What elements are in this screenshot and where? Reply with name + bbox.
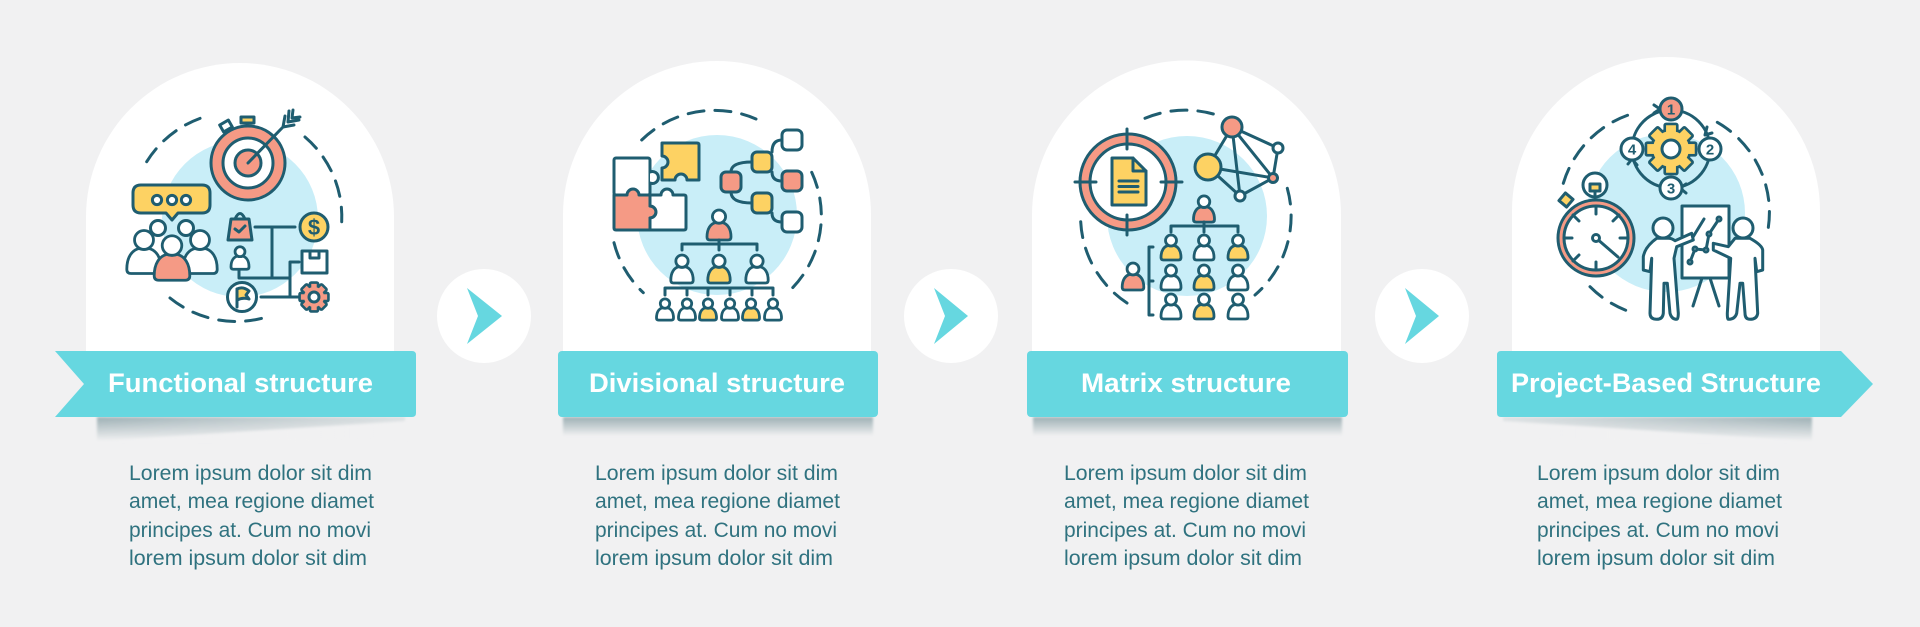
icon: numbered process cycle: 1 bbox=[1667, 102, 1675, 118]
ribbon bbox=[1027, 351, 1348, 417]
icon: target with document bbox=[1075, 129, 1182, 235]
text block bbox=[595, 462, 840, 570]
text block: Lorem ipsum dolor sit dim bbox=[129, 462, 372, 485]
panel: project-based structure bbox=[1497, 57, 1873, 570]
text block: principes at. Cum no movi bbox=[595, 519, 837, 542]
arch background bbox=[86, 63, 394, 355]
pale blue circle bbox=[162, 141, 318, 297]
text block: principes at. Cum no movi bbox=[1537, 519, 1779, 542]
pale blue circle bbox=[637, 135, 797, 295]
ribbon shadow bbox=[563, 417, 873, 436]
icon: org connector lines bbox=[239, 227, 299, 297]
pale blue circle bbox=[1107, 136, 1267, 296]
heading: Project-Based Structure bbox=[1511, 368, 1821, 398]
text block: amet, mea regione diamet bbox=[129, 490, 374, 513]
icon: team of people bbox=[127, 220, 217, 280]
text block: amet, mea regione diamet bbox=[595, 490, 840, 513]
arrow: step 3 to 4 bbox=[1375, 269, 1469, 363]
text block: lorem ipsum dolor sit dim bbox=[595, 547, 833, 570]
icon: shopping bag bbox=[228, 214, 252, 240]
icon: right presenter bbox=[1713, 218, 1763, 319]
heading: Divisional structure bbox=[589, 368, 845, 398]
text block: lorem ipsum dolor sit dim bbox=[1064, 547, 1302, 570]
arrow: step 1 to 2 bbox=[437, 269, 531, 363]
text block: amet, mea regione diamet bbox=[1537, 490, 1782, 513]
icon: numbered process cycle: 2 bbox=[1706, 142, 1714, 158]
ribbon bbox=[1497, 351, 1873, 417]
icon: stopwatch bbox=[1558, 173, 1634, 276]
text block: principes at. Cum no movi bbox=[129, 519, 371, 542]
icon: stopwatch target with arrow bbox=[211, 110, 300, 200]
icon: puzzle bbox=[614, 143, 699, 230]
dashed orbit bbox=[1081, 110, 1291, 306]
icon: box bbox=[302, 251, 327, 273]
text block bbox=[129, 462, 374, 570]
arch background bbox=[563, 61, 871, 355]
ribbon shadow bbox=[1033, 417, 1342, 436]
icon: person bbox=[231, 247, 249, 269]
text block: lorem ipsum dolor sit dim bbox=[129, 547, 367, 570]
dashed orbit bbox=[147, 117, 342, 321]
icon: left presenter bbox=[1643, 218, 1693, 319]
text block: Lorem ipsum dolor sit dim bbox=[1537, 462, 1780, 485]
arch background bbox=[1512, 57, 1820, 355]
ribbon bbox=[558, 351, 878, 417]
dashed orbit bbox=[614, 110, 821, 295]
icon: tree connectors bbox=[731, 140, 782, 222]
panel: matrix structure bbox=[1027, 61, 1348, 570]
text block bbox=[1537, 462, 1782, 570]
icon: tree nodes bbox=[721, 130, 802, 232]
org chart people bbox=[656, 210, 782, 320]
dashed orbit bbox=[1563, 115, 1769, 313]
icon: speech bubble bbox=[133, 185, 210, 220]
text block: principes at. Cum no movi bbox=[1064, 519, 1306, 542]
icon: presentation board bbox=[1682, 206, 1729, 306]
ribbon shadow bbox=[1503, 417, 1812, 441]
text block: Lorem ipsum dolor sit dim bbox=[595, 462, 838, 485]
text block: amet, mea regione diamet bbox=[1064, 490, 1309, 513]
ribbon shadow bbox=[97, 417, 405, 441]
arch background bbox=[1032, 61, 1341, 355]
heading: Functional structure bbox=[108, 368, 373, 398]
arrow: step 2 to 3 bbox=[904, 269, 998, 363]
icon: numbered process cycle bbox=[1621, 98, 1721, 199]
icon: dollar coin: $ bbox=[308, 215, 320, 240]
icon: network nodes bbox=[1195, 117, 1283, 201]
panel: divisional structure bbox=[558, 61, 878, 570]
text block bbox=[1064, 462, 1309, 570]
ribbon bbox=[55, 351, 416, 417]
icon: numbered process cycle: 4 bbox=[1628, 142, 1637, 158]
icon: numbered process cycle: 3 bbox=[1667, 180, 1675, 198]
icon: gear bbox=[301, 284, 327, 310]
text block: lorem ipsum dolor sit dim bbox=[1537, 547, 1775, 570]
icon: flag badge bbox=[228, 282, 256, 312]
text block: Lorem ipsum dolor sit dim bbox=[1064, 462, 1307, 485]
icon: dollar coin bbox=[300, 213, 328, 241]
matrix org people bbox=[1122, 196, 1248, 319]
pale blue circle bbox=[1587, 134, 1745, 292]
heading: Matrix structure bbox=[1081, 368, 1291, 398]
panel: functional structure bbox=[55, 63, 416, 570]
